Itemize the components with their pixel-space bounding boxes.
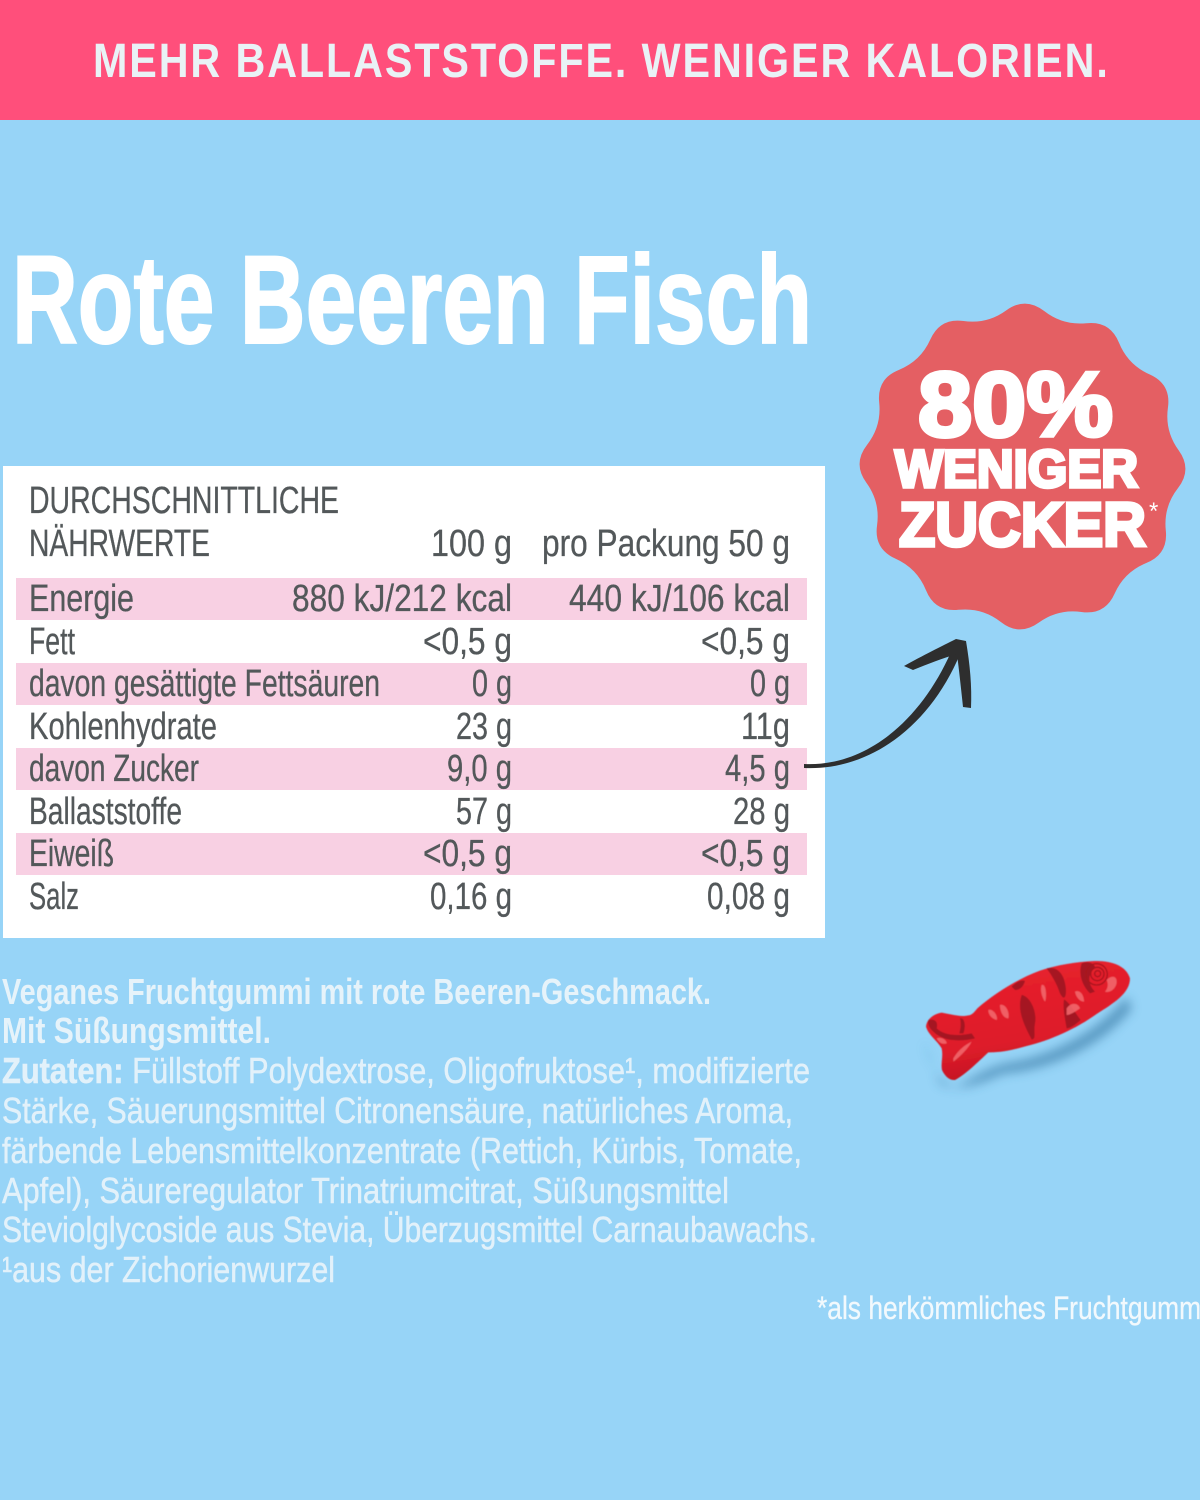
row: Ballaststoffe	[29, 791, 790, 833]
fish eye	[1086, 964, 1107, 985]
row: davon Zucker: 4,5 g	[725, 748, 790, 790]
table heading: pro Packung 50 g	[542, 523, 790, 565]
row: Eiweiß	[16, 833, 807, 875]
row: Fett	[29, 621, 790, 663]
row: Ballaststoffe: 57 g	[456, 791, 512, 833]
badge: 80% weniger Zucker: 80%	[918, 354, 1113, 456]
row: Fett: <0,5 g	[701, 621, 790, 663]
row: Kohlenhydrate: Kohlenhydrate	[29, 706, 217, 748]
ingredients text: Stärke, Säuerungsmittel Citronensäure, natürliches Aroma,	[2, 1090, 793, 1131]
header banner: MEHR BALLASTSTOFFE. WENIGER KALORIEN.	[93, 34, 1108, 88]
ingredients text: ¹aus der Zichorienwurzel	[2, 1249, 335, 1290]
row: gesättigte Fettsäuren	[16, 663, 807, 705]
row: Kohlenhydrate: 23 g	[456, 706, 512, 748]
row: Salz: 0,16 g	[430, 876, 512, 918]
ingredients text: Zutaten: Füllstoff Polydextrose, Oligofruktose¹, modifizierte	[2, 1050, 810, 1091]
table heading	[29, 480, 790, 565]
row: Energie	[16, 578, 807, 620]
panel: nutrition table	[3, 466, 825, 938]
row: Salz	[29, 876, 790, 918]
fish highlights	[937, 977, 1117, 1062]
row: Energie: 440 kJ/106 kcal	[569, 578, 790, 620]
row: Eiweiß: <0,5 g	[701, 833, 790, 875]
row: Energie: 880 kJ/212 kcal	[292, 578, 512, 620]
ingredients text: färbende Lebensmittelkonzentrate (Rettich, Kürbis, Tomate,	[2, 1130, 802, 1171]
row: Eiweiß: <0,5 g	[423, 833, 512, 875]
row: Ballaststoffe: 28 g	[733, 791, 790, 833]
table heading: 100 g	[431, 523, 512, 565]
row: Salz: 0,08 g	[707, 876, 790, 918]
row: Fett: Fett	[29, 621, 75, 663]
row: Fett: <0,5 g	[423, 621, 512, 663]
ingredients text	[2, 971, 817, 1290]
badge: 80% weniger Zucker: WENIGER	[895, 440, 1138, 499]
row: Eiweiß: Eiweiß	[29, 833, 114, 875]
title: Rote Beeren Fisch	[12, 231, 812, 370]
table heading: NÄHRWERTE	[29, 523, 210, 565]
badge: 80% weniger Zucker: ZUCKER	[899, 491, 1146, 560]
row: Ballaststoffe: Ballaststoffe	[29, 791, 182, 833]
row: Kohlenhydrate	[29, 706, 790, 748]
badge: 80% weniger Zucker: *	[1149, 498, 1158, 525]
row: gesättigte Fettsäuren: 0 g	[750, 663, 790, 705]
ingredients text: Veganes Fruchtgummi mit rote Beeren-Geschmack.	[2, 971, 711, 1012]
icon: red gummy fish	[923, 961, 1132, 1087]
arrow from sugar row to badge	[804, 639, 971, 768]
table heading: DURCHSCHNITTLICHE	[29, 480, 339, 522]
ingredients text: Mit Süßungsmittel.	[2, 1010, 271, 1051]
row: davon Zucker: davon Zucker	[29, 748, 199, 790]
row: davon Zucker	[16, 748, 807, 790]
badge: 80% weniger Zucker	[857, 301, 1188, 632]
row: Salz: Salz	[29, 876, 79, 918]
fish stripes	[928, 962, 1095, 1040]
ingredients text: Apfel), Säureregulator Trinatriumcitrat, Süßungsmittel	[2, 1170, 729, 1211]
ingredients text: Steviolglycoside aus Stevia, Überzugsmittel Carnaubawachs.	[2, 1209, 817, 1250]
row: gesättigte Fettsäuren: 0 g	[472, 663, 512, 705]
header banner	[0, 0, 1200, 120]
row: davon Zucker: 9,0 g	[447, 748, 512, 790]
row: Energie: Energie	[29, 578, 134, 620]
row: Kohlenhydrate: 11g	[741, 706, 790, 748]
row: gesättigte Fettsäuren: davon gesättigte Fettsäuren	[29, 663, 380, 705]
